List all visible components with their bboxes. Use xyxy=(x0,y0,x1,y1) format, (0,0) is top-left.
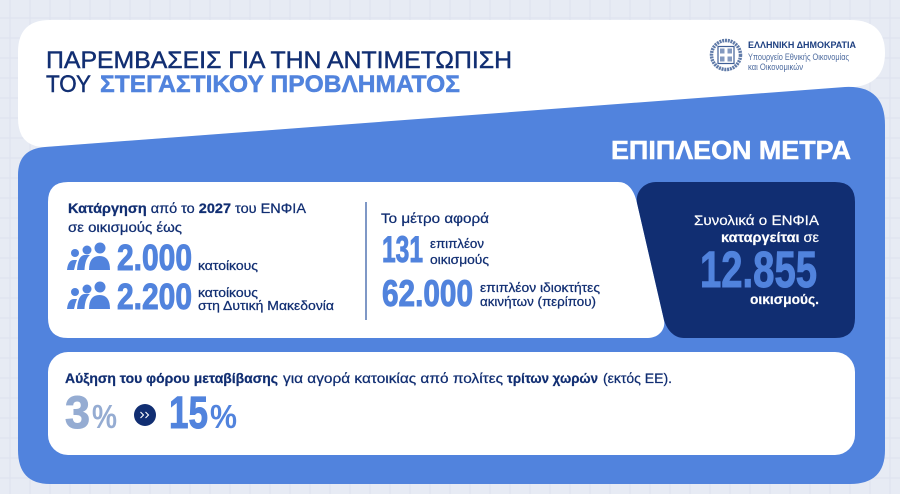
text: transfer tax increase: για αγορά κατοικίας από πολίτες xyxy=(283,370,503,386)
text: transfer tax increase xyxy=(65,370,672,386)
text: transfer tax increase: Αύξηση του φόρου μεταβίβασης xyxy=(65,370,278,386)
stat: 62.000 owners: ακινήτων (περίπου) xyxy=(480,295,596,309)
stat: 15%: 15 xyxy=(169,387,208,438)
heading: additional measures: ΕΠΙΠΛΕΟΝ ΜΕΤΡΑ xyxy=(611,135,851,165)
stat: 2.000 residents xyxy=(117,237,258,278)
stat: 3% xyxy=(65,387,117,438)
text: abolition intro xyxy=(68,200,307,235)
stat: 2.200 residents in Western Macedonia xyxy=(117,276,334,317)
stat: 2.200 residents in Western Macedonia: κατοίκους xyxy=(198,286,258,300)
stat: 2.200 residents in Western Macedonia: 2.200 xyxy=(117,276,192,317)
stat: 3%: 3 xyxy=(65,387,90,438)
stat: 62.000 owners xyxy=(382,273,600,314)
stat: 12.855: 12.855 xyxy=(700,241,817,298)
stat: 3%: % xyxy=(92,398,117,435)
stat: 2.200 residents in Western Macedonia: στη Δυτική Μακεδονία xyxy=(198,299,334,313)
title: ΤΟΥ xyxy=(46,71,91,98)
icon: national emblem xyxy=(712,40,740,70)
title: ΣΤΕΓΑΣΤΙΚΟΥ ΠΡΟΒΛΗΜΑΤΟΣ xyxy=(100,71,460,98)
stat: 2.000 residents: 2.000 xyxy=(117,237,192,278)
title: ΠΑΡΕΜΒΑΣΕΙΣ ΓΙΑ ΤΗΝ ΑΝΤΙΜΕΤΩΠΙΣΗ xyxy=(46,47,512,74)
text: transfer tax increase: τρίτων χωρών xyxy=(507,370,598,386)
text: measure concerns: Το μέτρο αφορά xyxy=(381,210,489,226)
panel: white header xyxy=(18,20,885,147)
stat: 62.000 owners: επιπλέον ιδιοκτήτες xyxy=(480,281,600,295)
stat: 131 settlements: οικισμούς xyxy=(430,253,489,267)
panel: total abolition xyxy=(637,182,855,338)
logo: Ελληνική Δημοκρατία xyxy=(712,40,856,72)
title xyxy=(46,47,512,98)
text: total ENFIA: καταργείται σε xyxy=(721,230,819,245)
stat: 131 settlements: 131 xyxy=(382,229,423,270)
stat: 131 settlements: επιπλέον xyxy=(430,237,484,251)
text: total ENFIA: Συνολικά ο ΕΝΦΙΑ xyxy=(694,212,820,228)
text: settlements: οικισμούς. xyxy=(750,292,819,307)
stat: 2.000 residents: κατοίκους xyxy=(198,259,258,273)
logo: Ελληνική Δημοκρατία: Υπουργείο Εθνικής Οικονομίας xyxy=(748,52,850,62)
stat: 62.000 owners: 62.000 xyxy=(382,273,473,314)
logo: Ελληνική Δημοκρατία: και Οικονομικών xyxy=(748,62,803,72)
text: abolition intro: Κατάργηση από το 2027 του ΕΝΦΙΑ xyxy=(68,200,307,216)
text: total ENFIA xyxy=(694,212,820,245)
panel: transfer tax xyxy=(48,352,855,455)
stat: 15%: % xyxy=(210,398,237,435)
panel: abolition of ENFIA xyxy=(48,182,664,338)
icon: people xyxy=(67,282,110,309)
logo: Ελληνική Δημοκρατία: ΕΛΛΗΝΙΚΗ ΔΗΜΟΚΡΑΤΙΑ xyxy=(748,40,856,50)
icon: people xyxy=(67,242,110,270)
text: transfer tax increase: (εκτός ΕΕ). xyxy=(603,370,672,386)
icon: arrow circle xyxy=(134,404,156,426)
text: abolition intro: σε οικισμούς έως xyxy=(68,219,182,235)
stat: 131 settlements xyxy=(382,229,489,270)
